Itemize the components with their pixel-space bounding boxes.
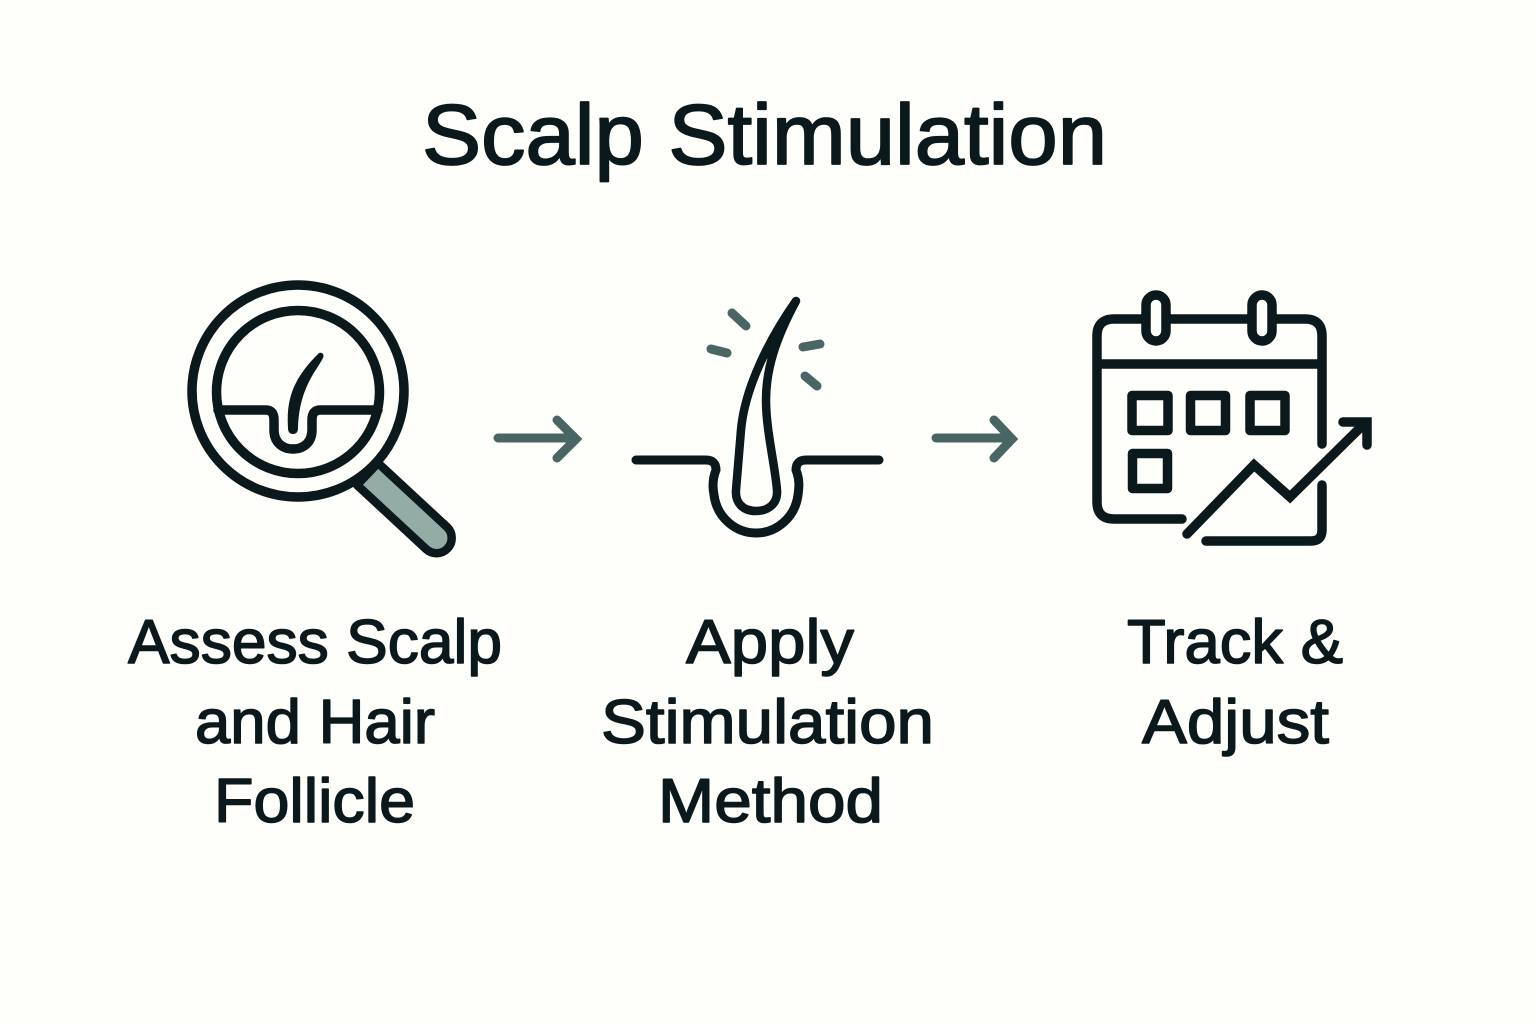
scalp line with follicle [218, 410, 378, 449]
calendar frame [1097, 319, 1322, 541]
calendar day squares [1132, 396, 1285, 488]
skin line and follicle [636, 460, 879, 533]
hair strand [736, 301, 796, 511]
arrow: step two to step three [936, 420, 1012, 458]
hair strand [288, 353, 324, 434]
label: assess scalp and hair follicle: Assess Scalp [128, 608, 502, 677]
icon: magnifying glass over hair follicle [192, 285, 452, 553]
label: apply stimulation method: Stimulation [601, 688, 934, 757]
magnifier lens rings [192, 285, 404, 497]
rising trend arrow [1187, 422, 1367, 534]
arrow: step one to step two [498, 420, 576, 458]
label: apply stimulation method: Method [658, 767, 883, 836]
label: assess scalp and hair follicle: and Hair [195, 688, 435, 757]
label: assess scalp and hair follicle: Follicle [214, 767, 415, 836]
stimulation marks [711, 313, 820, 386]
label: apply stimulation method: Apply [686, 608, 854, 677]
magnifier handle [357, 463, 452, 553]
label: track and adjust [1127, 608, 1343, 757]
label: apply stimulation method [601, 608, 934, 836]
label: track and adjust: Track & [1127, 608, 1343, 677]
label: assess scalp and hair follicle [128, 608, 502, 836]
title: Scalp Stimulation [422, 88, 1107, 183]
icon: calendar with rising trend [1097, 295, 1367, 541]
hair tip fill [763, 301, 796, 360]
label: track and adjust: Adjust [1142, 688, 1329, 757]
icon: hair follicle with stimulation marks [636, 301, 879, 533]
calendar rings [1146, 295, 1272, 341]
